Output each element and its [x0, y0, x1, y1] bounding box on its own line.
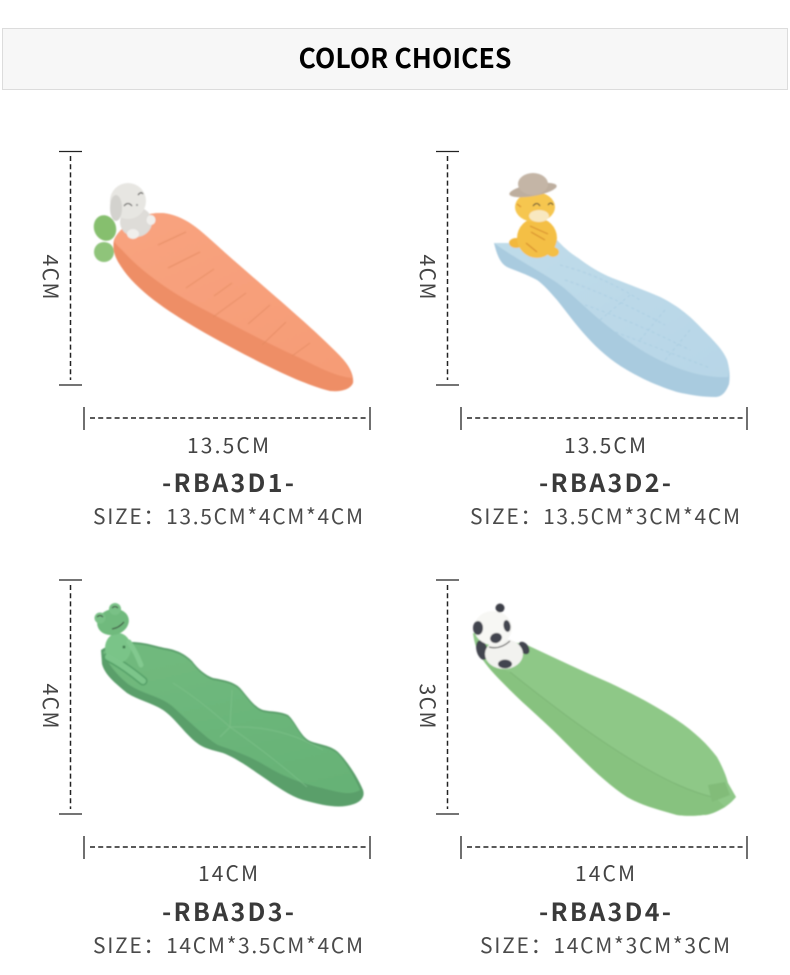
height label: 4CM	[413, 254, 443, 300]
height dimension	[436, 152, 459, 385]
product code: -RBA3D3-	[162, 893, 294, 929]
size text: SIZE：14CM*3.5CM*4CM	[93, 930, 363, 960]
icon: fish dish	[494, 173, 730, 397]
width dimension	[461, 836, 747, 859]
panel: RBA3D2 fish	[413, 152, 747, 531]
icon: lily leaf dish	[94, 603, 364, 807]
width dimension	[461, 407, 747, 430]
icon: panda figure	[473, 604, 532, 669]
size text: SIZE：13.5CM*3CM*4CM	[470, 501, 740, 531]
icon: rabbit figure	[110, 183, 156, 239]
width label: 13.5CM	[564, 430, 646, 460]
width dimension	[84, 407, 370, 430]
width label: 14CM	[198, 858, 258, 888]
width label: 14CM	[575, 858, 635, 888]
icon: bamboo leaf dish	[473, 604, 736, 816]
product code: -RBA3D1-	[162, 464, 294, 500]
product code: -RBA3D4-	[539, 893, 671, 929]
height dimension	[59, 152, 82, 385]
header bar	[2, 28, 788, 90]
icon: frog figure	[94, 603, 143, 681]
height label: 4CM	[36, 254, 66, 300]
panel: RBA3D1 carrot	[36, 152, 370, 531]
height label: 3CM	[413, 684, 443, 728]
icon: cat figure	[508, 173, 559, 258]
width dimension	[84, 836, 370, 859]
icon: carrot dish	[90, 183, 353, 391]
panel: RBA3D4 bamboo leaf	[413, 580, 747, 960]
size text: SIZE：14CM*3CM*3CM	[480, 930, 730, 960]
width label: 13.5CM	[187, 430, 269, 460]
height dimension	[436, 580, 459, 814]
height label: 4CM	[36, 684, 66, 728]
height dimension	[59, 580, 82, 814]
title: COLOR CHOICES	[298, 37, 512, 76]
panel: RBA3D3 lily leaf	[36, 580, 370, 960]
size text: SIZE：13.5CM*4CM*4CM	[93, 501, 363, 531]
product code: -RBA3D2-	[539, 464, 671, 500]
